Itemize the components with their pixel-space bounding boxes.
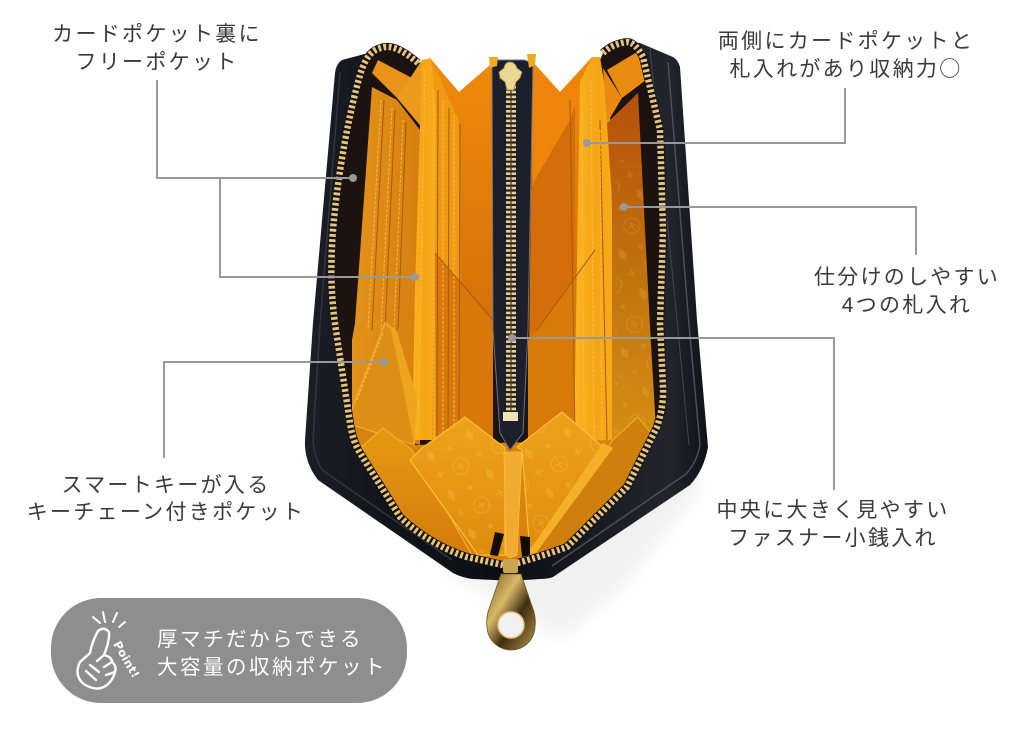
leader: smart key pocket — [164, 358, 388, 458]
centre zipper centre line — [510, 86, 512, 412]
right top pocket lit — [531, 60, 591, 183]
centre coin pocket zipper tape — [492, 60, 533, 450]
pull tab plate — [487, 574, 535, 650]
wallet outer body right — [510, 42, 708, 581]
bottom zipper slider — [503, 559, 518, 573]
label: smart key pocket: キーチェーン付きポケット — [27, 501, 305, 524]
left card slots stitching — [368, 100, 406, 330]
left zipper tape — [331, 47, 503, 565]
right centre lower panel — [528, 90, 575, 440]
label: free pocket: カードポケット裏に — [52, 23, 262, 46]
centre fold strip — [504, 452, 522, 558]
label: bill compartments: 4つの札入れ — [842, 294, 972, 317]
left back flap — [372, 60, 412, 98]
zipper stop — [503, 412, 518, 421]
icon: pointing hand — [78, 612, 125, 689]
left card pocket panel — [352, 87, 420, 445]
leather edge highlights — [313, 48, 700, 566]
leader: card pockets — [583, 88, 845, 147]
interior dark lining — [331, 42, 663, 565]
wallet photo — [305, 42, 708, 650]
label: bill compartments: 仕分けのしやすい — [814, 266, 1000, 289]
right gusset fold strip — [528, 443, 613, 553]
bottom left main gusset — [410, 417, 505, 555]
bottom orange lining — [352, 426, 655, 563]
leader: free pocket — [157, 80, 419, 281]
right slot stitching — [537, 80, 616, 440]
right zipper tape — [510, 42, 663, 565]
bottom right gusset monogram — [520, 414, 601, 550]
smart key pocket — [351, 323, 417, 445]
centre gold corner tabs — [489, 54, 536, 68]
pull tab hole — [498, 612, 524, 638]
badge text: 厚マチだからできる — [157, 628, 363, 651]
wallet outer body left — [305, 47, 515, 581]
label: coin zipper: ファスナー小銭入れ — [728, 527, 938, 550]
right fold diagonal area — [528, 250, 600, 440]
point text: Point! — [110, 638, 143, 680]
bottom right main gusset — [517, 412, 603, 553]
right gusset — [603, 68, 622, 123]
label: card pockets: 札入れがあり収納力○ — [729, 53, 963, 83]
zipper pull tab — [487, 574, 535, 650]
centre zipper teeth — [506, 86, 516, 412]
bottom left gusset monogram — [414, 419, 504, 553]
left centre orange pocket — [425, 58, 493, 440]
label: card pockets: 両側にカードポケットと — [718, 30, 974, 53]
right yellow card panel — [574, 57, 617, 445]
left centre lower triangle — [435, 253, 493, 440]
smart key pocket fold — [391, 330, 417, 440]
label: coin zipper: 中央に大きく見やすい — [716, 499, 950, 522]
right back pocket monogram — [614, 160, 652, 440]
badge text: 大容量の収納ポケット — [157, 656, 387, 679]
bottom left small pocket — [360, 428, 473, 557]
black gaps beside centre strip — [490, 532, 530, 557]
top zipper slider — [499, 62, 522, 90]
left slot stitching — [418, 70, 493, 440]
smart key pocket stitching — [357, 333, 383, 400]
leader: coin zipper — [508, 334, 834, 490]
right back pocket — [607, 93, 656, 445]
left yellow fold strip — [412, 58, 436, 440]
right centre orange pocket — [528, 57, 592, 440]
point badge — [51, 598, 407, 703]
left gusset — [397, 60, 424, 130]
right zipper teeth — [510, 42, 663, 565]
leader: bill compartments — [620, 203, 916, 255]
wallet drop shadow — [440, 470, 700, 640]
right back flap — [607, 52, 646, 98]
badge background — [51, 598, 407, 703]
label: free pocket: フリーポケット — [75, 51, 239, 74]
bottom right small pocket — [530, 417, 654, 555]
left zipper teeth — [331, 47, 503, 565]
left centre card panel — [426, 62, 462, 440]
label: smart key pocket: スマートキーが入る — [61, 474, 271, 497]
